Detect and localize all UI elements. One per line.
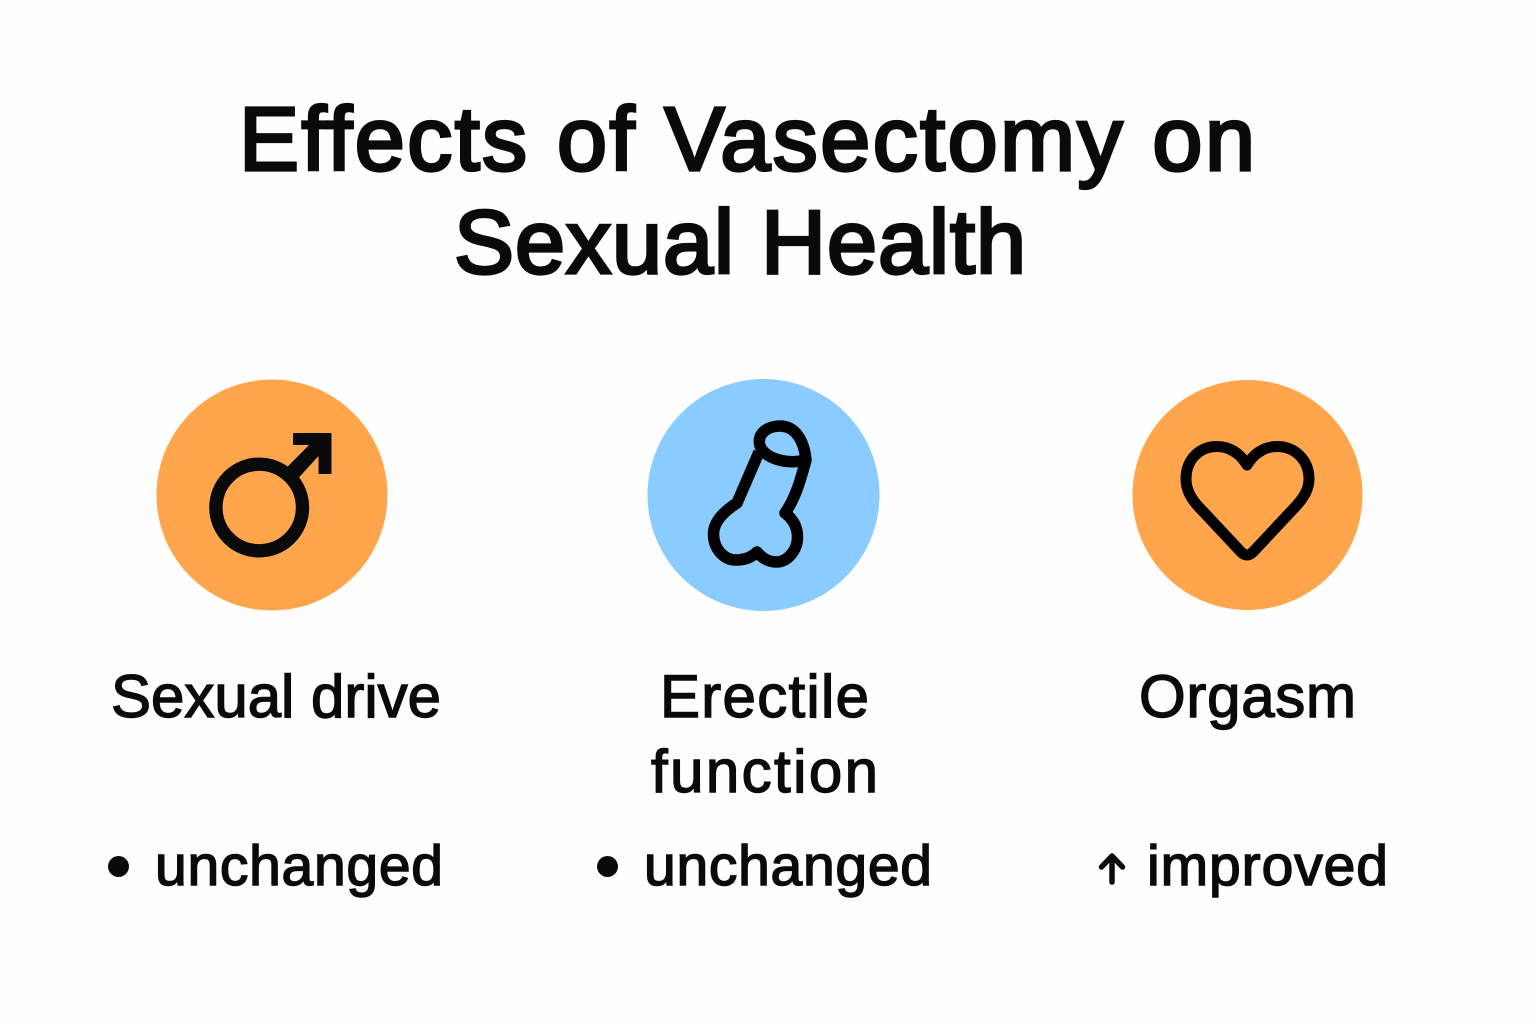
icon: anatomical outline on blue circle [648, 379, 880, 611]
icon: heart on orange circle [1132, 380, 1362, 610]
label: sexual drive: Sexual drive [111, 663, 441, 730]
title [239, 90, 1255, 293]
status: orgasm improved [1102, 834, 1388, 898]
label: erectile function [651, 663, 878, 805]
title: Effects of Vasectomy on [239, 90, 1255, 190]
arrow up [1102, 856, 1122, 882]
label: orgasm: Orgasm [1139, 663, 1356, 730]
label: erectile function: Erectile [660, 663, 869, 730]
value text: improved [1147, 834, 1388, 898]
value text: unchanged [644, 834, 932, 898]
title: Sexual Health [454, 193, 1026, 293]
icon: male symbol on orange circle [156, 380, 388, 610]
value text: unchanged [155, 834, 443, 898]
status: sexual drive unchanged [108, 834, 443, 898]
label: erectile function: function [651, 738, 878, 805]
bullet [108, 856, 129, 877]
bullet [597, 856, 618, 877]
status: erectile function unchanged [597, 834, 932, 898]
